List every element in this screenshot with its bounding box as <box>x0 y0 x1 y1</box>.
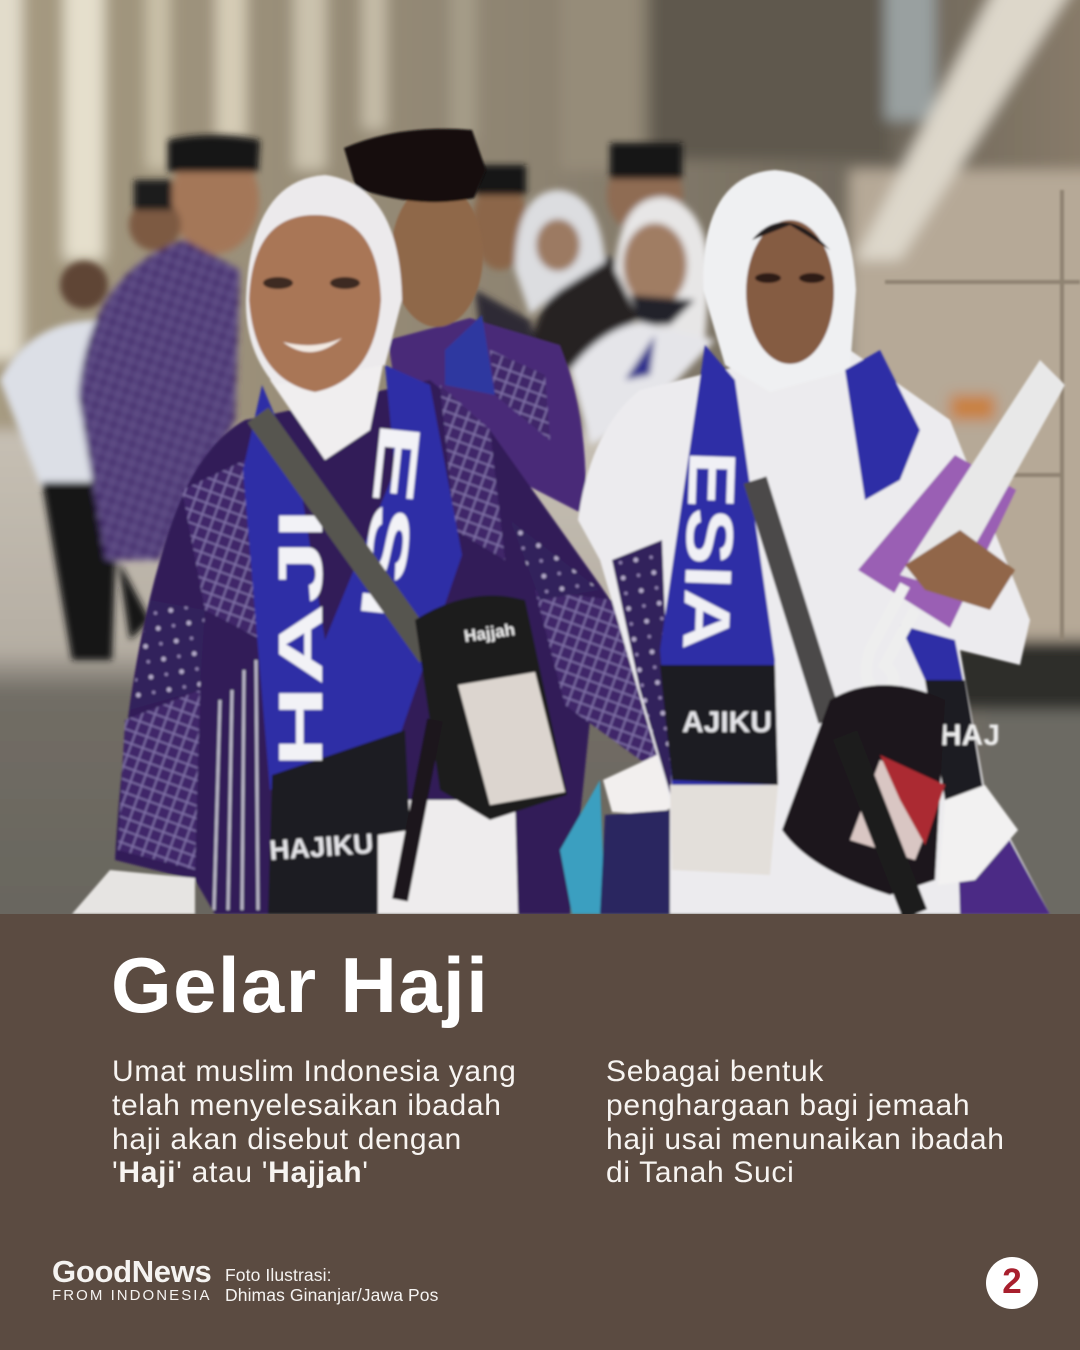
pilgrim on the right: ESIA <box>669 450 750 652</box>
text block: right column: Sebagai bentuk <box>606 1055 824 1088</box>
striped scarf end <box>214 660 258 910</box>
blue scarf right band <box>845 350 920 500</box>
pilgrim on the left <box>72 175 730 914</box>
text block: left column: 'Haji' atau 'Hajjah' <box>112 1156 369 1189</box>
text block: left column <box>112 1055 517 1189</box>
photo: Indonesian hajj pilgrims walking <box>0 0 1080 914</box>
photo credit: Foto Ilustrasi: <box>225 1265 332 1285</box>
blue scarf with lettering: ESI <box>347 419 433 624</box>
man in purple batik <box>78 135 260 560</box>
men behind centre <box>472 143 683 380</box>
sling bag strap <box>258 415 430 655</box>
background: wall panels <box>885 190 1080 640</box>
folder <box>858 455 1016 628</box>
text block: left column: haji akan disebut dengan <box>112 1123 462 1156</box>
blue scarf left band <box>660 345 775 785</box>
walker in white shirt <box>0 261 150 660</box>
logo: GoodNews from Indonesia <box>52 1254 212 1304</box>
photo credit <box>225 1265 438 1304</box>
logo: GoodNews from Indonesia: FROM INDONESIA <box>52 1287 212 1304</box>
pilgrim on the right: AJIKU <box>682 706 772 739</box>
hijab <box>703 170 856 392</box>
heading: Gelar Haji <box>111 941 489 1029</box>
blue scarf with lettering: HAJIKU <box>268 828 374 866</box>
face <box>746 220 834 364</box>
photo credit: Dhimas Ginanjar/Jawa Pos <box>225 1284 438 1304</box>
pilgrim on the right: HAJ <box>940 719 1000 752</box>
women in white behind <box>515 190 715 445</box>
text block: right column <box>606 1055 1005 1189</box>
logo: GoodNews from Indonesia: GoodNews <box>52 1254 212 1289</box>
text block: right column: penghargaan bagi jemaah <box>606 1089 970 1122</box>
white skirt <box>370 800 518 914</box>
page number badge <box>986 1257 1038 1309</box>
face <box>249 215 381 392</box>
text block: left column: telah menyelesaikan ibadah <box>112 1089 502 1122</box>
black bag <box>782 685 945 895</box>
sling strap <box>755 480 830 720</box>
pilgrim on the left: Hajjah <box>463 620 516 646</box>
man with black peci <box>344 129 586 515</box>
blue scarf with lettering: HAJI <box>267 508 336 768</box>
background: building and road <box>0 0 1080 954</box>
page number badge: 2 <box>1002 1262 1022 1301</box>
text block: right column: di Tanah Suci <box>606 1156 794 1189</box>
hijab <box>246 175 402 385</box>
sling bag <box>415 596 567 820</box>
umbrella <box>900 360 1065 590</box>
white collar <box>270 355 385 460</box>
hand <box>905 530 1015 610</box>
text block: right column: haji usai menunaikan ibadah <box>606 1123 1005 1156</box>
robe batik panels <box>118 385 695 870</box>
batik robe <box>115 380 700 914</box>
tassels <box>938 785 1018 885</box>
blue scarf with lettering <box>243 365 462 914</box>
cuff and hand <box>603 735 722 815</box>
background: distant walkers <box>0 135 715 660</box>
text block: left column: Umat muslim Indonesia yang <box>112 1055 517 1088</box>
white robe <box>578 350 1050 914</box>
pilgrim on the right <box>578 170 1065 914</box>
